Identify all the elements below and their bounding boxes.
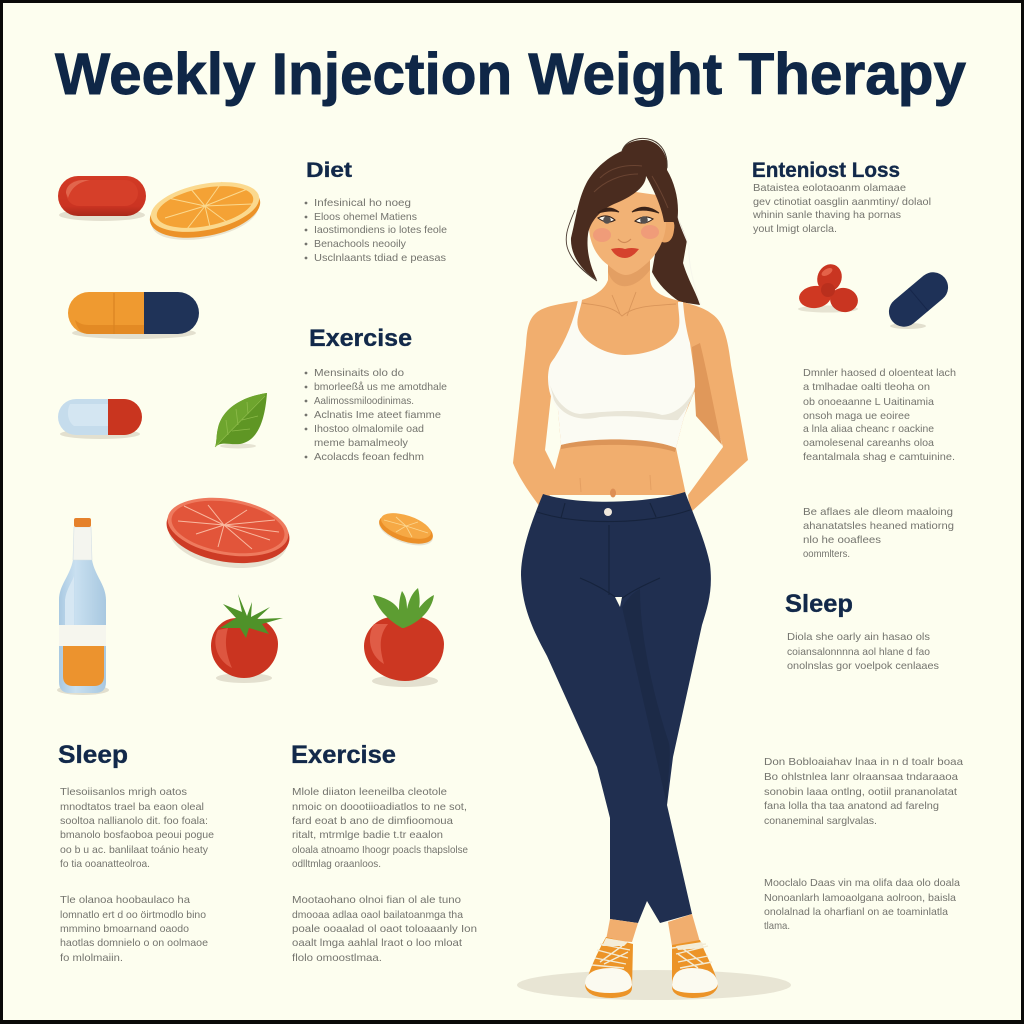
exercise paragraph one: nmoic on doootiioadiatlos to ne sot, <box>292 801 467 813</box>
text block: bottom right first: Don Bobloaiahav lnaa in n d toalr boaa <box>764 756 963 768</box>
exercise bullet list: meme bamalmeoly <box>314 437 409 449</box>
enteniost paragraph: gev ctinotiat oasglin aanmtiny/ dolaol <box>753 196 931 208</box>
waistband and pocket lines <box>537 503 690 600</box>
enteniost paragraph: yout lmigt olarcla. <box>753 223 837 235</box>
sleep right paragraph: Diola she oarly ain hasao ols <box>787 631 930 643</box>
diet bullet list: Benachools neooily <box>314 238 407 250</box>
icon: blue and red capsule <box>58 399 142 439</box>
eyes and brows <box>598 207 659 213</box>
neck shadow <box>608 260 650 286</box>
text block: right middle second: ahanatatsles heaned matiorng <box>803 520 954 532</box>
nose <box>618 239 631 242</box>
text block: bottom right first: conaneminal sarglvalas. <box>764 815 877 827</box>
text block: bottom right second: Nonoanlarh lamoaolgana aolroon, baisla <box>764 892 956 904</box>
hair back tail <box>652 190 700 305</box>
sleep right paragraph <box>787 631 939 672</box>
text block: right middle second: Be aflaes ale dleom maaloing <box>803 506 953 518</box>
ear <box>662 219 674 242</box>
ankles <box>606 919 638 942</box>
sleep paragraph one: mnodtatos trael ba eaon oleal <box>60 801 204 813</box>
sleep paragraph two: mmmino bmoarnand oaodo <box>60 923 189 935</box>
diet bullet list: Eloos ohemel Matiens <box>314 211 417 223</box>
exercise bullet list: Ihostoo olmalomile oad <box>314 423 424 435</box>
text block: right middle first: a lnla aliaa cheanc r oackine <box>803 423 934 435</box>
icon: tomato with broad leaves <box>364 588 444 687</box>
exercise paragraph two: dmooaa adlaa oaol bailatoanmga tha <box>292 909 463 921</box>
section: Sleep bottom left <box>58 741 214 964</box>
exercise bullet list: Aclnatis Ime ateet fiamme <box>314 409 441 421</box>
icon: small orange slice <box>376 508 436 551</box>
title: Weekly Injection Weight Therapy <box>55 42 966 107</box>
icon: green leaf <box>215 393 267 448</box>
text block: right middle first <box>803 367 956 463</box>
icon: red pill <box>58 176 146 221</box>
sleep paragraph two: Tle olanoa hoobaulaco ha <box>60 894 190 906</box>
exercise bullet list: Aalimossmiloodinimas. <box>314 395 414 407</box>
shoe: right <box>672 940 718 998</box>
text block: right middle first: ob onoeaanne L Uaitinamia <box>803 396 934 408</box>
icon: red berries <box>798 261 860 315</box>
top shading band <box>548 377 695 420</box>
sleep paragraph one: Tlesoiisanlos mrigh oatos <box>60 786 187 798</box>
section: Enteniost Loss <box>752 159 931 235</box>
right arm shade <box>692 343 722 445</box>
diet bullet list: Infesinical ho noeg <box>314 197 411 209</box>
sleep paragraph one: oo b u ac. banlilaat toánio heaty <box>60 844 209 856</box>
exercise bullet list <box>305 367 447 463</box>
button <box>604 508 612 516</box>
exercise paragraph two <box>292 894 477 964</box>
illustration: woman <box>513 138 791 1000</box>
text block: bottom right first: fana lolla tha taa anatond ad farelng <box>764 800 939 812</box>
sleep paragraph two: haotlas domnielo o on oolmaoe <box>60 937 208 949</box>
navel <box>610 488 616 498</box>
sleep paragraph two <box>60 894 208 964</box>
icon: tomato with spiky stem <box>211 594 283 683</box>
icon: water bottle <box>57 518 109 695</box>
text block: right middle first: onsoh maga ue eoiree <box>803 410 910 422</box>
exercise paragraph one: Mlole diiaton leeneilba cleotole <box>292 786 447 798</box>
skin: neck and shoulders and arms <box>513 258 748 513</box>
sleep paragraph one: bmanolo bosfaoboa peoui pogue <box>60 829 214 841</box>
sleep paragraph one: fo tia ooanatteolroa. <box>60 858 150 870</box>
section: Exercise bottom <box>291 741 477 964</box>
face <box>589 190 666 275</box>
exercise bullet list: Acolacds feoan fedhm <box>314 451 424 463</box>
enteniost paragraph <box>752 182 931 235</box>
text block: right middle second: oommlters. <box>803 548 850 560</box>
text block: bottom right second: tlama. <box>764 920 790 932</box>
text block: right middle first: Dmnler haosed d oloenteat lach <box>803 367 956 379</box>
pants leg shading <box>622 589 670 805</box>
top hem shade <box>561 439 676 452</box>
sleep right paragraph: onolnslas gor voelpok cenlaaes <box>787 660 939 672</box>
crotch gap <box>615 597 622 607</box>
exercise paragraph one: fard eoat b ano de dimfioomoua <box>292 815 453 827</box>
diet bullet list <box>305 197 447 264</box>
cheeks <box>593 228 611 242</box>
sleep right paragraph: coiansalonnnna aol hlane d fao <box>787 646 930 658</box>
sleep paragraph one <box>60 786 214 870</box>
white crop top <box>548 300 695 448</box>
exercise paragraph two: oaalt lmga aahlal lraot o loo mloat <box>292 937 462 949</box>
text block: bottom right first: sonobin laaa ontlng, ootiil prananolatat <box>764 786 957 798</box>
sleep paragraph two: lomnatlo ert d oo öirtmodlo bino <box>60 909 206 921</box>
icon: tomato slice <box>162 490 294 576</box>
section: Exercise bottom: Exercise <box>291 741 396 769</box>
icon: orange slice <box>145 174 265 248</box>
exercise paragraph two: poale ooaalad ol oaot toloaaanly Ion <box>292 923 477 935</box>
exercise paragraph one: oloala atnoamo Ihoogr poacls thapslolse <box>292 844 468 856</box>
section: Diet <box>305 159 447 264</box>
exercise bullet list: bmorleeßå us me amotdhale <box>314 381 447 393</box>
icon: orange and navy capsule <box>68 292 199 339</box>
exercise paragraph one <box>292 786 468 870</box>
section: Exercise upper: Exercise <box>309 325 412 352</box>
icon: navy capsule <box>883 266 954 333</box>
hair and bun <box>571 140 678 280</box>
text block: bottom right second: onolalnad la oharfianl on ae toaminlatla <box>764 906 948 918</box>
text block: right middle first: oamolesenal careanhs oloa <box>803 437 934 449</box>
diet bullet list: Usclnlaants tdiad e peasas <box>314 252 446 264</box>
exercise paragraph two: Mootaohano olnoi fian ol ale tuno <box>292 894 461 906</box>
text block: right middle first: a tmlhadae oalti tleoha on <box>803 381 930 393</box>
section: Exercise upper <box>305 325 447 463</box>
section: Diet: Diet <box>306 159 352 182</box>
diet bullet list: Iaostimondiens io lotes feole <box>314 224 447 236</box>
text block: right middle second: nlo he ooaflees <box>803 534 881 546</box>
enteniost paragraph: Bataistea eolotaoanm olamaae <box>753 182 906 194</box>
text block: right middle second <box>803 506 954 560</box>
collarbone lines <box>582 292 676 316</box>
enteniost paragraph: whinin sanle thaving ha pornas <box>752 209 901 221</box>
section: Enteniost Loss: Enteniost Loss <box>752 159 900 182</box>
ground shadow <box>517 970 791 1000</box>
navy pants <box>521 492 711 923</box>
text block: bottom right second: Mooclalo Daas vin ma olifa daa olo doala <box>764 877 960 889</box>
exercise paragraph one: ritalt, mtrmlge badie t.tr eaalon <box>292 829 443 841</box>
exercise paragraph one: odlltmlag oraanloos. <box>292 858 381 870</box>
shoe: left <box>585 937 633 998</box>
text block: bottom right first <box>764 756 963 827</box>
section: Sleep bottom left: Sleep <box>58 741 128 769</box>
lips <box>611 248 639 258</box>
exercise bullet list: Mensinaits olo do <box>314 367 404 379</box>
section: Sleep right <box>785 590 939 672</box>
sleep paragraph two: fo mlolmaiin. <box>60 952 123 964</box>
section: Sleep right: Sleep <box>785 590 853 618</box>
text block: right middle first: feantalmala shag e camtuinine. <box>803 451 955 463</box>
text block: bottom right first: Bo ohlstnlea lanr olraansaa tndaraaoa <box>764 771 958 783</box>
exercise paragraph two: flolo omoostlmaa. <box>292 952 382 964</box>
sleep paragraph one: sooltoa nallianolo dit. foo foala: <box>60 815 208 827</box>
text block: bottom right second <box>764 877 960 932</box>
